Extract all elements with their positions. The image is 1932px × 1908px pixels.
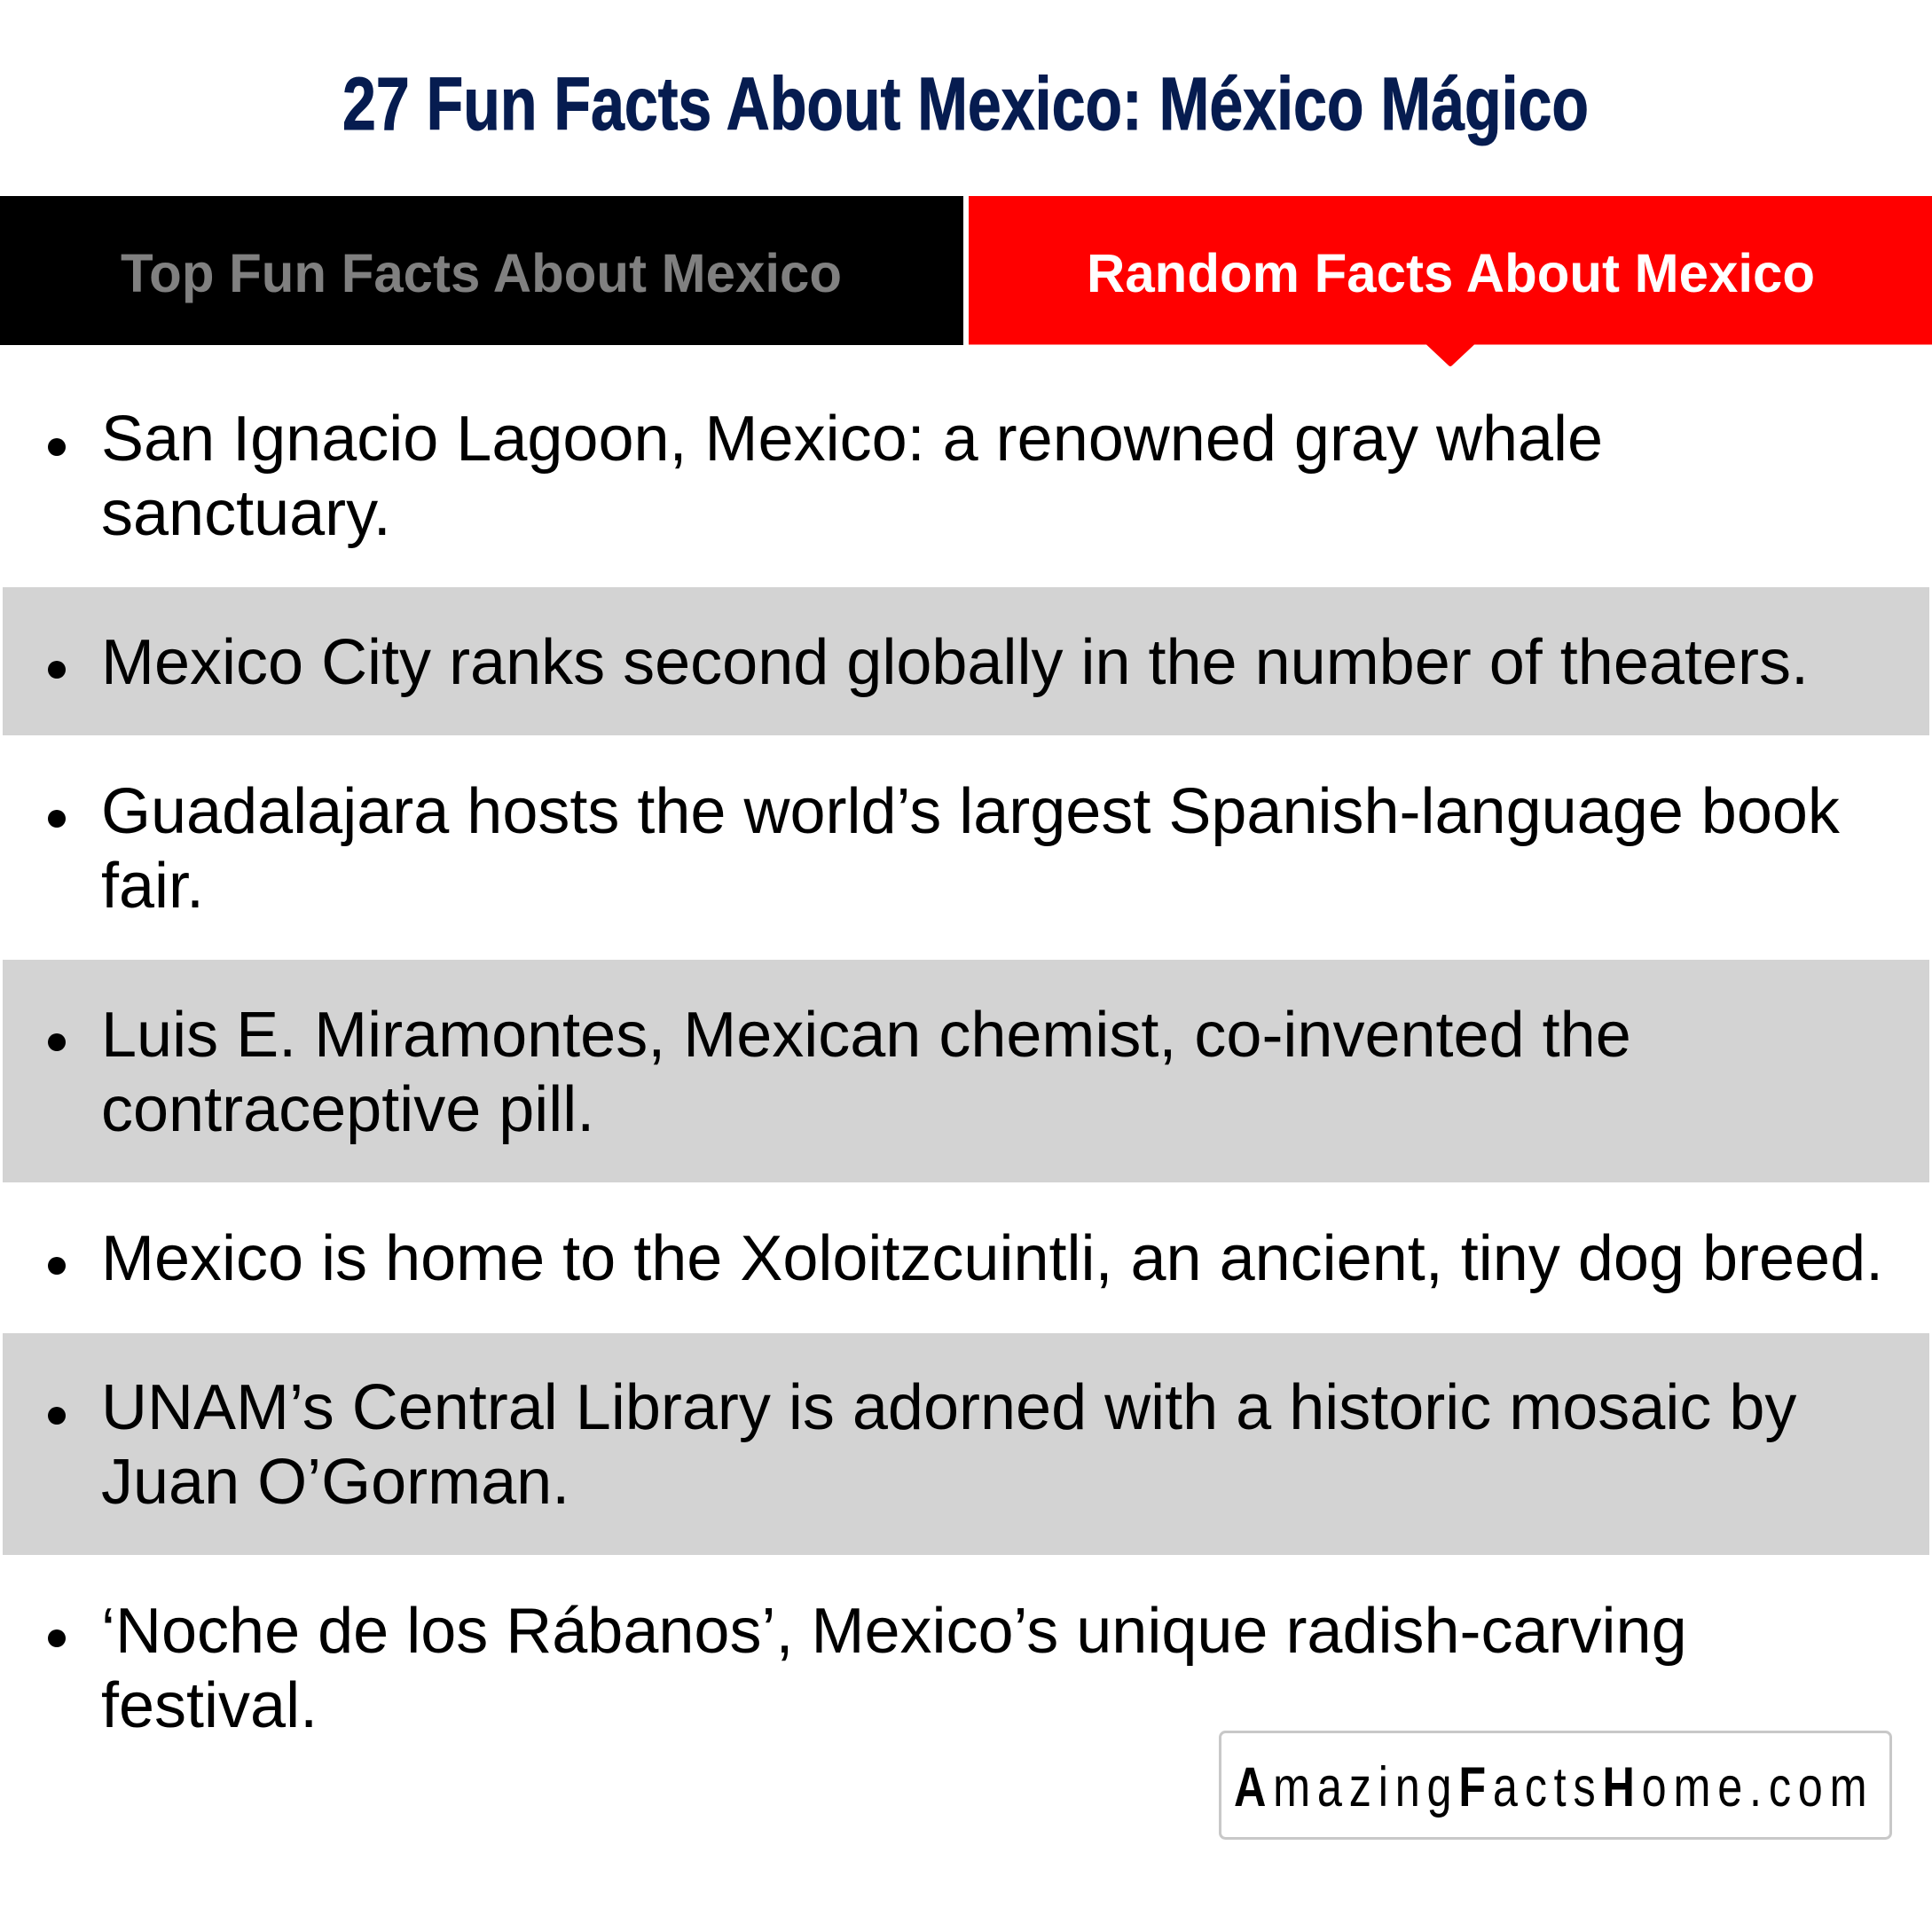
fact row 6: Juan O’Gorman.: [101, 1447, 569, 1518]
fact row 2: [3, 587, 1929, 735]
fact row 7: ‘Noche de los Rábanos’, Mexico’s unique radish-carving: [101, 1596, 1687, 1667]
fact row 7: [48, 1596, 1687, 1741]
fact row 1: sanctuary.: [101, 478, 391, 549]
fact row 6: [3, 1333, 1929, 1555]
tab: random facts (active): [969, 196, 1932, 366]
fact row 1: San Ignacio Lagoon, Mexico: a renowned gray whale: [101, 404, 1603, 475]
fact row 4: [3, 960, 1929, 1182]
fact row 6: UNAM’s Central Library is adorned with a historic mosaic by: [101, 1372, 1796, 1443]
fact row 3: fair.: [101, 851, 204, 922]
fact row 1: [48, 404, 1603, 549]
fact row 2: Mexico City ranks second globally in the number of theaters.: [101, 627, 1809, 698]
tab: random facts (active): Random Facts About Mexico: [1087, 243, 1815, 303]
title: 27 Fun Facts About Mexico: México Mágico: [342, 62, 1589, 145]
tab: top fun facts: [0, 196, 963, 345]
fact row 3: Guadalajara hosts the world’s largest Spanish-language book: [101, 776, 1841, 847]
fact row 4: Luis E. Miramontes, Mexican chemist, co-invented the: [101, 1000, 1631, 1071]
watermark: AmazingFactsHome.com: [1221, 1731, 1891, 1838]
watermark: AmazingFactsHome.com: AmazingFactsHome.com: [1234, 1756, 1867, 1818]
fact row 4: contraceptive pill.: [101, 1074, 594, 1145]
fact row 7: festival.: [101, 1670, 318, 1741]
fact row 3: [48, 776, 1841, 922]
tab: top fun facts: Top Fun Facts About Mexico: [121, 243, 842, 303]
fact row 5: Mexico is home to the Xoloitzcuintli, an ancient, tiny dog breed.: [101, 1223, 1883, 1294]
